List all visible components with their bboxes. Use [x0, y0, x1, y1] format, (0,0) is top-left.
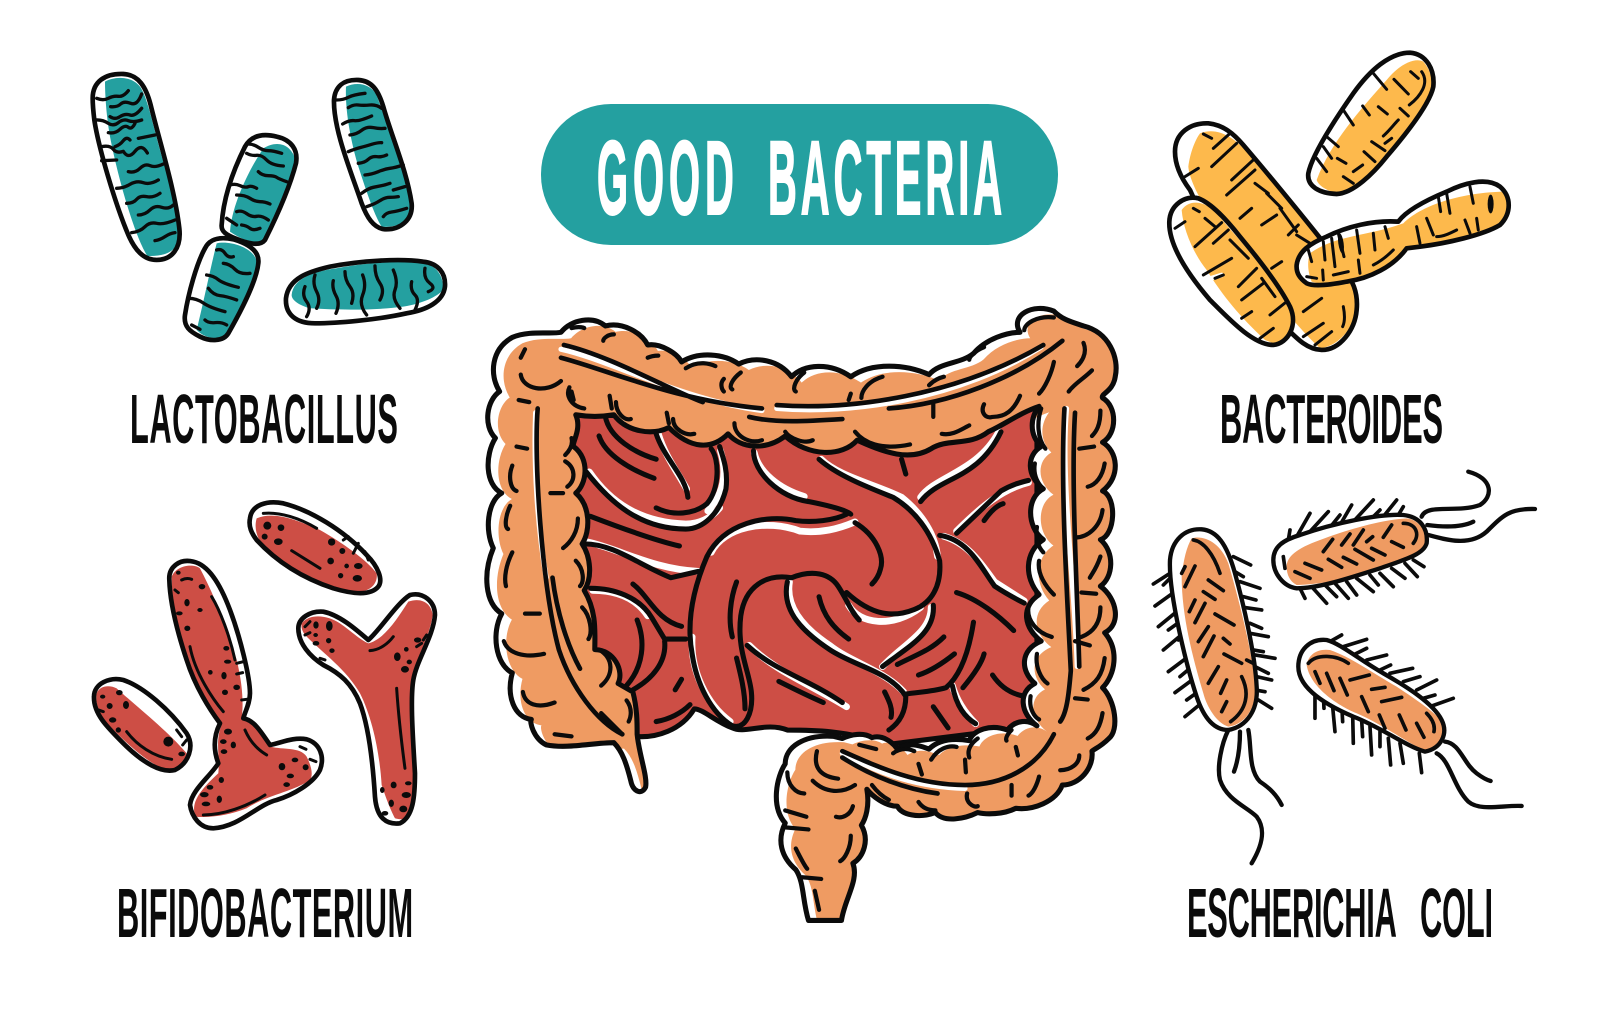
- panel: lactobacillus bacteria: [93, 74, 445, 340]
- bacterium cell B: [222, 135, 296, 244]
- bacterium cell D: [334, 80, 412, 229]
- label: lactobacillus: LACTOBACILLUS: [130, 381, 398, 459]
- large intestine colon: [487, 308, 1126, 926]
- title badge: [541, 104, 1058, 245]
- title text: BACTERIA: [768, 119, 1002, 236]
- title text: GOOD: [597, 119, 734, 236]
- bacterium cell left: [94, 679, 190, 771]
- panel: intestines illustration: [487, 308, 1126, 926]
- panel: bifidobacterium bacteria: [94, 502, 435, 828]
- bacterium cell Y shaped: [298, 594, 435, 824]
- bacterium cell top: [250, 502, 380, 593]
- bacterium cell top right: [1273, 472, 1535, 603]
- label: escherichia coli: [1187, 875, 1493, 953]
- title text: [597, 119, 1002, 236]
- small intestine: [572, 404, 1037, 745]
- bacterium cell E: [286, 260, 445, 323]
- panel: escherichia coli bacteria: [1153, 472, 1535, 863]
- bacterium cell A: [93, 74, 180, 260]
- label: escherichia coli: COLI: [1420, 875, 1493, 953]
- colon haustra folds: [504, 317, 1105, 910]
- bacterium cell C: [185, 238, 258, 340]
- bacterium cell bottom right: [1298, 635, 1522, 807]
- bacterium cell branched club: [169, 561, 322, 828]
- bacterium cell top: [1308, 53, 1434, 194]
- colon longitudinal bands: [535, 341, 1079, 793]
- bacterium cell left: [1153, 529, 1282, 863]
- label: bacteroides: BACTEROIDES: [1220, 381, 1443, 459]
- bacterium cell large back: [1175, 123, 1357, 350]
- label: bifidobacterium: BIFIDOBACTERIUM: [117, 875, 413, 953]
- label: escherichia coli: ESCHERICHIA: [1187, 875, 1397, 953]
- bacterium cell lower left: [1169, 198, 1293, 345]
- bacterium cell right horizontal: [1297, 182, 1509, 285]
- panel: bacteroides bacteria: [1169, 53, 1509, 350]
